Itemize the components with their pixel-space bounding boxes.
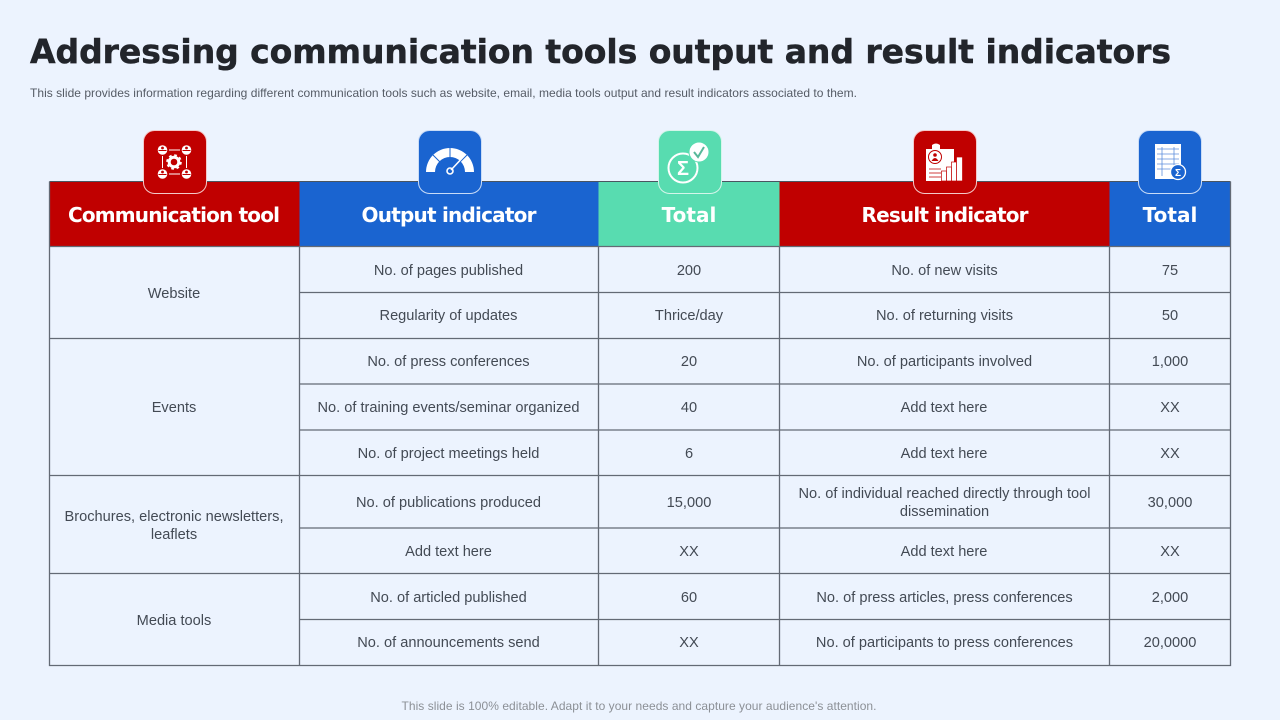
column: result indicator: dissemination [900,504,989,520]
column: result indicator: No. of individual reached directly through tool [798,486,1091,502]
column: result indicator: No. of press articles, press conferences [816,590,1073,606]
column: result indicator: No. of new visits [891,263,998,279]
column: output total: XX [679,635,699,651]
column: result total: XX [1160,400,1180,416]
header row: Communication tool [68,203,280,227]
column: result indicator: Add text here [901,544,987,560]
column: result total: XX [1160,446,1180,462]
column: output indicator: Add text here [405,544,492,560]
subtitle: This slide provides information regarding different communication tools such as website, email, media tools output and result indicators associated to them. [30,86,857,100]
column: result total: 20,0000 [1144,635,1196,651]
column: output indicator: No. of publications produced [356,495,541,511]
column: output total: 6 [685,446,693,462]
column: output indicator: Regularity of updates [380,308,517,324]
column: output indicator: No. of articled published [370,590,527,606]
column: communication tool: Website [148,286,200,302]
column: output indicator: No. of project meetings held [358,446,539,462]
icon: spreadsheet with sigma: Σ [1175,168,1181,179]
column: communication tool: Events [152,400,196,416]
column: output indicator: No. of announcements send [357,635,540,651]
table [50,182,1230,666]
title: Addressing communication tools output and result indicators [30,32,1171,71]
column: output total: 15,000 [667,495,711,511]
grid lines [50,182,1230,666]
column: output total: 60 [681,590,697,606]
column: communication tool: leaflets [151,527,197,543]
column: communication tool [64,286,284,629]
column: output total [655,263,724,651]
column: output total: 200 [677,263,701,279]
icon: gauge [418,130,482,194]
column: output indicator: No. of training events/seminar organized [317,400,580,416]
header row: Total [662,203,716,227]
header row: Output indicator [362,203,537,227]
column: output indicator [317,263,580,651]
column: communication tool: Media tools [137,613,211,629]
column: communication tool: Brochures, electronic newsletters, [64,509,284,525]
column: result indicator: Add text here [901,446,987,462]
column: output indicator: No. of pages published [374,263,523,279]
column: output total: XX [679,544,699,560]
header row: Result indicator [862,203,1029,227]
column: result total: XX [1160,544,1180,560]
column: result total: 30,000 [1148,495,1192,511]
icon: spreadsheet with sigma [1138,130,1202,194]
icon: sigma with check [658,130,722,194]
column: result indicator: No. of participants to press conferences [816,635,1073,651]
column: output total: 20 [681,354,697,370]
column: result indicator [798,263,1091,651]
icon: people network with gear [144,130,206,194]
column: output total: 40 [681,400,697,416]
column: result total: 1,000 [1152,354,1188,370]
column: result total [1144,263,1196,651]
column: result total: 75 [1162,263,1178,279]
column: result total: 50 [1162,308,1178,324]
column: output indicator: No. of press conferences [367,354,530,370]
icon: clipboard with chart [914,130,976,194]
column: result indicator: No. of returning visits [876,308,1013,324]
column: output total: Thrice/day [655,308,724,324]
column: result total: 2,000 [1152,590,1188,606]
column: result indicator: No. of participants involved [857,354,1032,370]
footer note: This slide is 100% editable. Adapt it to your needs and capture your audience's attention. [402,699,876,713]
header row [50,182,1230,246]
header row: Total [1143,203,1197,227]
icon: sigma with check: Σ [677,158,689,180]
column: result indicator: Add text here [901,400,987,416]
